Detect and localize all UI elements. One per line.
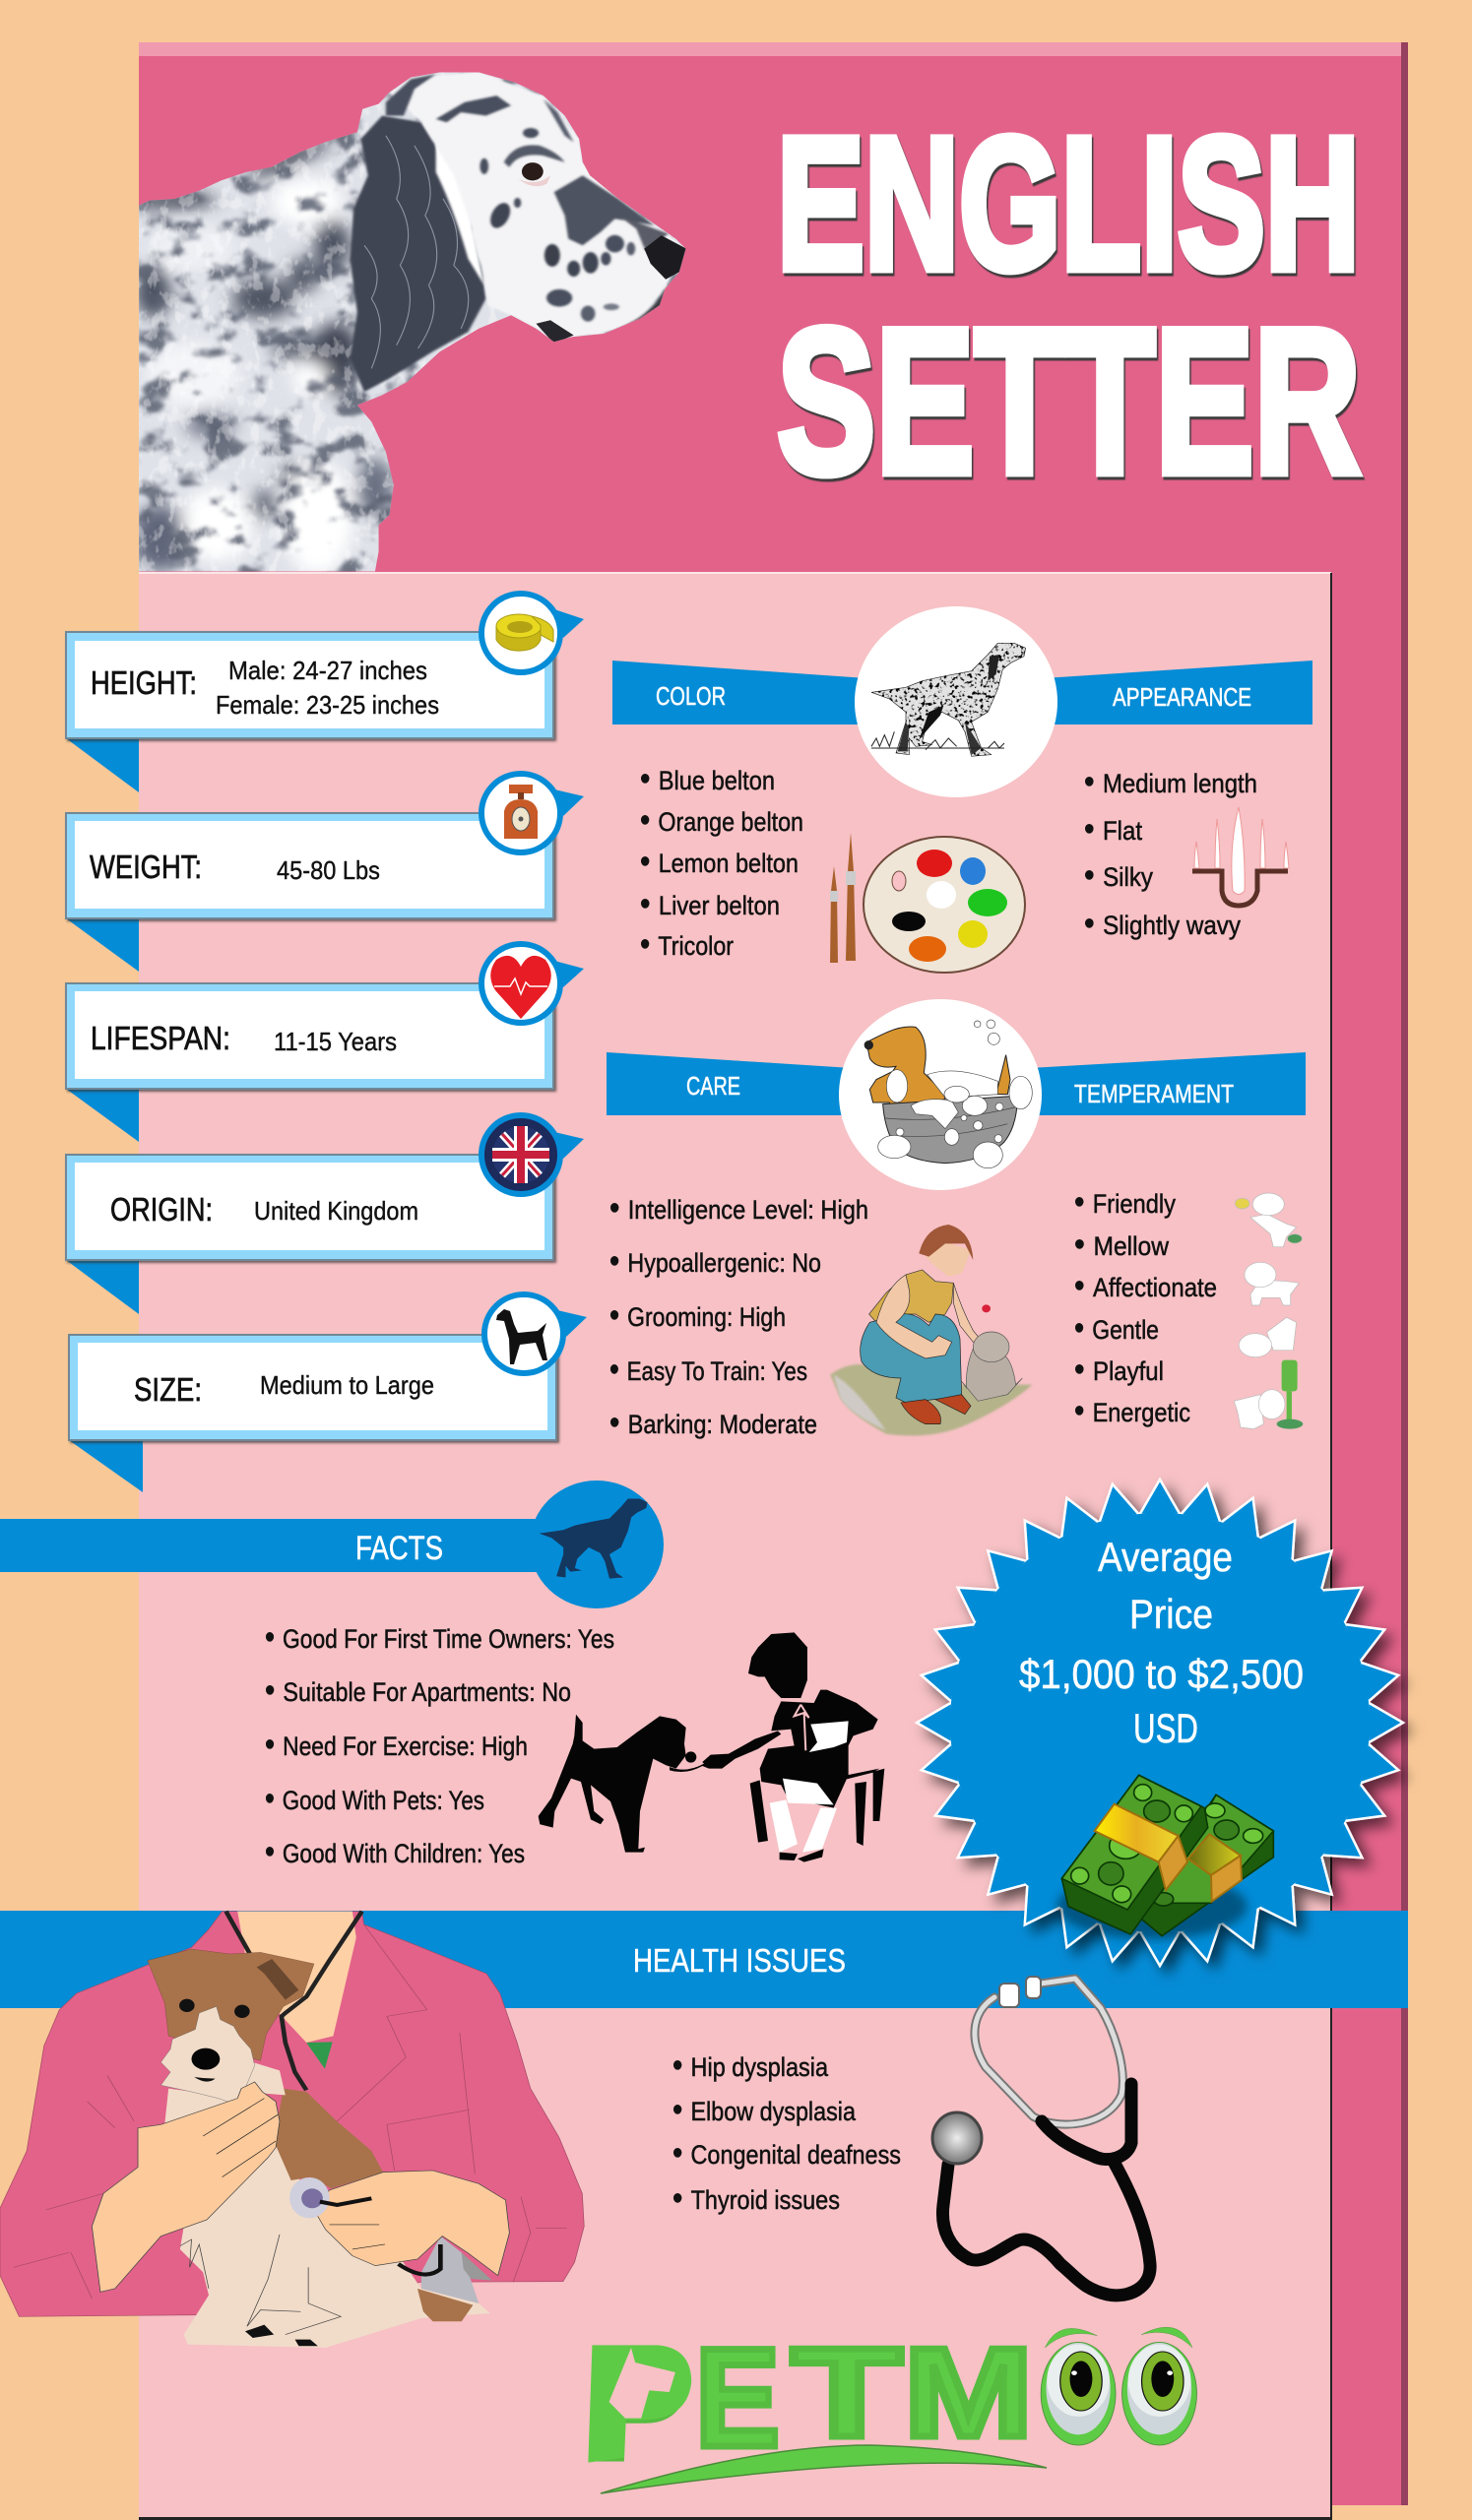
stat card: origin: United Kingdom <box>254 1196 418 1226</box>
list: appearance: • Flat <box>1084 810 1142 848</box>
stat card: weight: WEIGHT: <box>90 849 202 885</box>
stat card: height: Female: 23-25 inches <box>216 690 439 720</box>
bar: health issues: HEALTH ISSUES <box>633 1942 846 1979</box>
illustration: vet holding terrier <box>0 1912 584 2348</box>
ribbon: color and appearance <box>612 606 1312 797</box>
logo: Petmoo: P <box>590 2315 688 2491</box>
badge: average price: Price <box>1129 1591 1213 1637</box>
icon: kitchen scale <box>481 774 584 852</box>
list: temperament: • Playful <box>1074 1351 1164 1388</box>
stat card: height: Male: 24-27 inches <box>228 656 427 685</box>
list: colors: • Blue belton <box>640 760 775 797</box>
list: colors: • Liver belton <box>640 885 780 922</box>
list: temperament: • Gentle <box>1074 1309 1159 1347</box>
list: colors: • Lemon belton <box>640 843 799 880</box>
icon: dog silhouette <box>484 1294 587 1373</box>
list: temperament <box>1074 1183 1217 1429</box>
photo: english setter <box>124 66 695 575</box>
bar: health issues <box>0 1911 1408 2008</box>
list: facts <box>265 1618 614 1870</box>
ribbon: care and temperament: CARE <box>686 1071 740 1101</box>
icon: money stacks <box>1056 1775 1273 1939</box>
list: appearance <box>1084 763 1257 942</box>
list: colors: • Tricolor <box>640 925 734 963</box>
badge: average price: $1,000 to $2,500 <box>1019 1651 1304 1697</box>
icon: heart with pulse <box>481 944 584 1023</box>
ribbon: color and appearance: APPEARANCE <box>1113 682 1251 712</box>
ribbon: facts <box>0 1480 664 1608</box>
logo: Petmoo: T <box>792 2322 902 2464</box>
icons: white puppies <box>1234 1193 1303 1429</box>
stat card: size: SIZE: <box>134 1371 202 1408</box>
list: temperament: • Mellow <box>1074 1226 1169 1263</box>
icon: setter drawing <box>871 643 1026 756</box>
list: colors <box>640 760 803 963</box>
stat card: lifespan: LIFESPAN: <box>91 1020 230 1056</box>
stat card: height: HEIGHT: <box>91 664 197 701</box>
stat card: origin <box>66 1115 584 1314</box>
list: care: • Grooming: High <box>609 1296 786 1334</box>
logo: Petmoo: E <box>695 2320 780 2477</box>
badge: average price: Average <box>1098 1534 1233 1580</box>
list: appearance: • Medium length <box>1084 763 1257 800</box>
list: health issues: • Congenital deafness <box>672 2134 901 2172</box>
ribbon: care and temperament: TEMPERAMENT <box>1074 1079 1234 1108</box>
panel: light pink content <box>139 572 1332 2520</box>
icon: tape measure <box>481 594 584 672</box>
list: temperament: • Affectionate <box>1074 1267 1217 1304</box>
ribbon: care and temperament <box>607 999 1306 1190</box>
list: health issues: • Thyroid issues <box>672 2179 840 2217</box>
list: colors: • Orange belton <box>640 801 803 839</box>
illustration: child petting puppy <box>830 1225 1032 1436</box>
stat card: size <box>69 1294 587 1492</box>
ribbon: color and appearance: COLOR <box>656 681 726 711</box>
badge: average price: USD <box>1133 1705 1198 1751</box>
list: care <box>609 1189 868 1441</box>
list: facts: • Need For Exercise: High <box>265 1726 528 1763</box>
stat card: origin: ORIGIN: <box>110 1191 213 1228</box>
stat card: weight: 45-80 Lbs <box>277 855 380 885</box>
list: facts: • Good For First Time Owners: Yes <box>265 1618 614 1656</box>
list: appearance: • Slightly wavy <box>1084 905 1241 942</box>
stat card: height <box>66 594 584 792</box>
logo swoosh <box>601 2445 1047 2493</box>
list: facts: • Good With Children: Yes <box>265 1833 525 1870</box>
list: health issues <box>672 2047 901 2217</box>
logo: Petmoo <box>588 2315 1196 2493</box>
stat card: lifespan <box>66 944 584 1142</box>
icon: logo eyes and P cut-out <box>588 2327 1196 2463</box>
icon: hair follicle <box>1192 807 1289 906</box>
list: facts: • Good With Pets: Yes <box>265 1780 484 1817</box>
list: care: • Barking: Moderate <box>609 1404 817 1441</box>
list: care: • Easy To Train: Yes <box>609 1351 807 1388</box>
list: health issues: • Elbow dysplasia <box>672 2091 857 2128</box>
icon: stethoscope <box>932 1977 1150 2296</box>
list: temperament: • Energetic <box>1074 1392 1190 1429</box>
icon: dog in bath tub <box>864 1020 1032 1168</box>
list: appearance: • Silky <box>1084 856 1153 894</box>
illustration: child feeding dog silhouette <box>539 1632 884 1862</box>
list: health issues: • Hip dysplasia <box>672 2047 829 2084</box>
logo: Petmoo: M <box>904 2322 1033 2464</box>
icon: paint palette and brushes <box>830 833 1025 973</box>
stat card: size: Medium to Large <box>260 1370 434 1400</box>
ribbon: facts: FACTS <box>355 1530 443 1567</box>
list: facts: • Suitable For Apartments: No <box>265 1671 571 1709</box>
list: temperament: • Friendly <box>1074 1183 1176 1221</box>
list: care: • Intelligence Level: High <box>609 1189 868 1227</box>
stat card: weight <box>66 774 584 972</box>
icon: setter silhouette <box>540 1499 648 1579</box>
icon: UK flag <box>481 1115 584 1194</box>
badge: average price <box>917 1480 1403 1966</box>
title: English Setter <box>777 97 1361 517</box>
list: care: • Hypoallergenic: No <box>609 1242 821 1280</box>
stat card: lifespan: 11-15 Years <box>274 1027 397 1056</box>
